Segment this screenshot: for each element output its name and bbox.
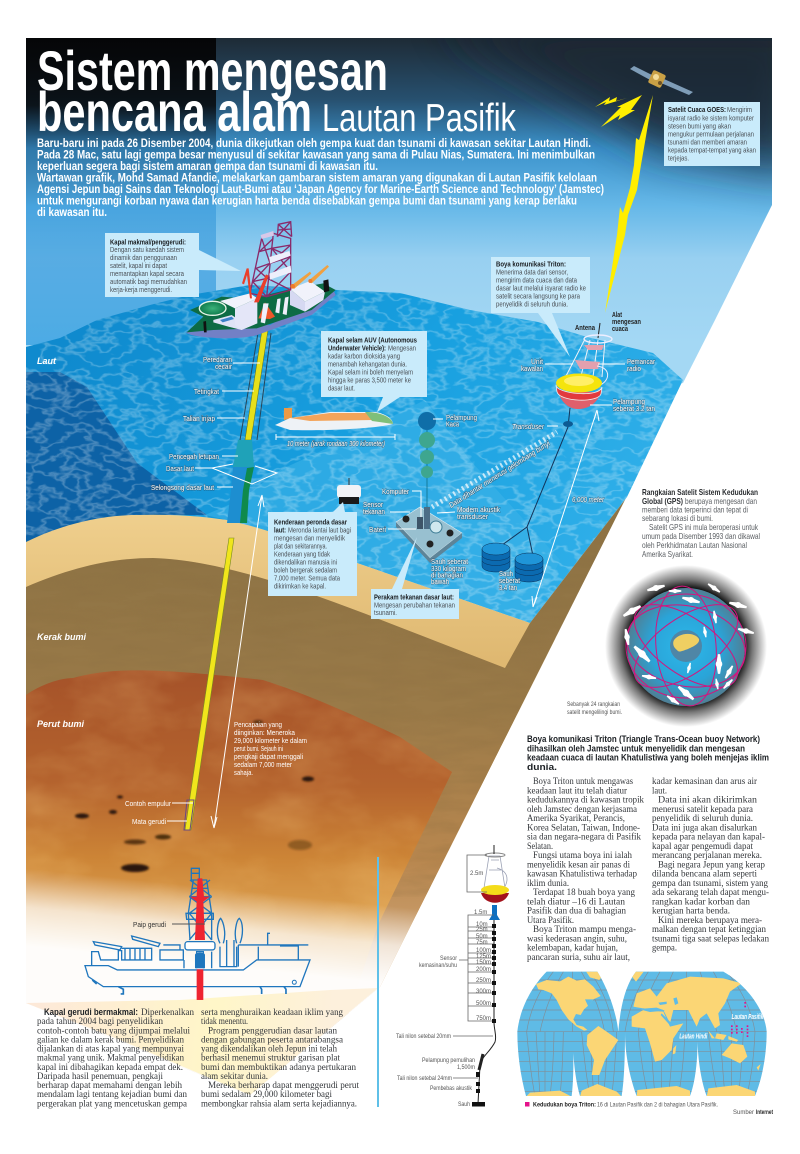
text: Triton article column 2: Data ini juga akan disalurkan [652,822,757,833]
labels: water column: cuaca [612,326,628,333]
derrick white decks [269,251,291,280]
layer: seabed sand [26,515,558,987]
fade to white [26,870,418,1094]
text: Triton article column 1: iklim dunia. [527,878,569,889]
labels: water column: Bateri [369,525,386,534]
Triton buoy illustration [498,323,612,556]
callout: Triton buoy [491,257,590,357]
labels: water column: radio [627,364,641,373]
mooring line [478,920,496,1104]
text: drilling target: pengkaji dapat menggali [234,752,303,761]
labels: earth layers: Kerak bumi [37,632,87,642]
text: Triton article column 1: Korea Selatan, Taiwan, Indone- [527,822,640,833]
depth labels: 125m [476,954,491,960]
text: drilling ship article: kapal ini dibahagikan kepada empat dek. [37,1062,183,1073]
text: GPS description: umum pada Disember 1993 dan dikawal [642,531,760,541]
map: world with Triton buoy positions: Lautan Pasifik [732,1012,764,1021]
labels: water column: Unit [531,357,544,366]
text: GPS description: memberi data terperinci dan tepat di [642,504,748,514]
callout: GOES satellite: kepada tempat-tempat yang akan [668,146,756,154]
labels: water column: kawalan [521,364,543,373]
diagram: drilling ship blueprint [85,868,310,1000]
arrow: 29,000 km drill target [211,495,264,828]
text: drilling ship article: galian ke dalam kerak bumi. Penyelidikan [37,1034,184,1045]
labels: water column: Selongsong dasar laut [151,483,215,492]
callout: AUV: menambah kehangatan dunia. [328,360,407,368]
callout: pressure recorder: tsunami. [374,608,397,617]
callout: pressure recorder: Perakam tekanan dasar laut: [374,592,454,602]
labels: water column: Transduser [512,422,544,431]
depth labels: 50m [476,934,488,940]
callout: AUV: hingga ke paras 3,500 meter ke [328,376,411,384]
depth labels: 10m [476,922,488,928]
earth [670,630,702,662]
callout: AUV: kadar karbon dioksida yang [328,352,400,360]
text: GPS description: oleh Perkhidmatan Lautan Nasional [642,540,747,550]
depth labels: 300m [476,989,491,995]
text: Triton article column 2: Data ini akan dikirimkan [658,794,757,806]
callout: AUV: dasar laut. [328,384,355,392]
heading: Triton network [527,734,769,773]
text: Triton article column 2: kapal agar pengemudi dapat [652,841,753,852]
labels: water column: Sensor [363,500,383,509]
text: drilling ship article: dengan gabungan peserta antarabangsa [201,1034,344,1045]
map: world with Triton buoy positions [510,970,777,1097]
label: drill pipe: Paip gerudi [133,920,166,929]
text: Triton article column 1: Amerika Syarikat, Perancis, [527,813,625,824]
layer: mantle [26,670,452,1040]
panel: ocean [26,285,686,630]
text: GPS description: sebarang lokasi di bumi. [642,513,713,523]
callout: GOES satellite: isyarat radio ke sistem komputer [668,114,754,122]
text: drilling ship article: pergerakan plat yang mencetuskan gempa [37,1098,188,1109]
text: drilling target: Pencapaian yang [234,720,282,729]
helipad [199,301,226,315]
satellites [647,583,665,593]
labels: water column: Pelampung [613,397,645,406]
part labels: Pelampung pemulihan [422,1057,475,1064]
text: Triton article column 1: Boya Triton mampu menga- [533,924,636,935]
labels: water column: Sauh [499,569,513,578]
labels: water column: Peredaran [203,355,232,364]
callout: seabed vehicle: dikendalikan manusia ini [274,558,337,566]
text: drilling target: diinginkan: Meneroka [234,728,296,737]
text: Triton article column 1: keadaan laut itu telah diatur [527,785,628,796]
text: drilling ship article: alam sekitar dunia. [201,1071,268,1082]
callout: Triton buoy: dasar laut melalui isyarat radio ke [496,284,586,292]
text: Triton article column 1: pancaran suria, suhu air laut, [527,952,630,963]
text: drilling ship article: berhasil menemui struktur garisan plat [201,1053,340,1064]
labels: earth layers: Contoh empulur [125,799,171,808]
text: Triton article column 2: laut. [652,785,667,796]
title [37,39,516,143]
callout: GOES satellite [664,102,760,166]
labels: water column: mengesan [612,319,641,326]
wedge: pale base of earth section [26,988,378,1095]
scale bar [276,434,395,440]
callout: seabed vehicle: plat dan sekitarannya. [274,542,327,550]
source credit [733,1109,773,1116]
part labels: Pembebas akustik [430,1085,472,1092]
legend: buoy positions [525,1102,718,1108]
intro text: Baru-baru ini pada 26 Disember 2004, dunia dikejutkan oleh gempa kuat dan tsunami di kawasan sekitar Lautan Hindi. [37,136,591,150]
text: Triton article column 1: Selatan. [527,841,553,852]
text: Triton article column 1: oleh Jamstec dengan kerjasama [527,804,638,815]
text: drilling ship article: makmal yang unik. Makmal penyelidikan [37,1053,184,1064]
legend: buoy positions: 16 di Lautan Pasifik dan 2 di bahagian Utara Pasifik. [597,1102,718,1108]
labels: water column: cecair [215,362,232,371]
text: Triton article column 1 [527,776,644,963]
labels: earth layers: Perut bumi [37,719,85,729]
text: Triton article column 1: Fungsi utama boya ini ialah [533,850,632,861]
text: drilling ship article: mendalam lagi tentang kejadian bumi dan [37,1089,187,1100]
caption: 24 satellites: Sebanyak 24 rangkaian [567,701,620,708]
text: Triton article column 2 [652,776,769,954]
icon: lightning signal bolts [595,89,653,313]
text: Triton article column 1: kedudukannya di kawasan tropik [527,794,644,806]
text: drilling target: sahaja. [234,768,253,777]
seabed pressure recorder [396,507,462,563]
callout: seabed vehicle: Kenderaan yang tidak [274,550,330,558]
callout: drilling laboratory ship: dinamik dan penggunaan [110,253,177,262]
orbits [619,584,753,708]
labels: water column: seberat 3.2 tan [613,404,655,413]
text: drilling ship article: dijalankan di atas kapal yang mempunyai [37,1044,184,1054]
part labels [396,955,475,1108]
text: Triton article column 1: Boya Triton untuk mengawas [533,776,633,787]
labels: earth layers [37,632,193,826]
text: drilling ship article: pada tahun 2004 bagi penyelidikan [37,1016,163,1027]
callout: drilling laboratory ship: kerja-kerja menggerudi. [110,285,172,294]
depth brackets [453,855,494,1078]
callout: AUV: Mengesan [388,344,416,352]
labels: water column: Kaca [446,420,460,428]
depth labels: 500m [476,1001,491,1007]
derrick lattice [250,222,292,297]
text: GPS description: Satelit GPS ini mula beroperasi untuk [649,522,759,532]
source credit: Internet [756,1109,773,1116]
graticule [510,972,777,1096]
text: drilling target: sedalam 7,000 meter [234,760,292,769]
labels: water column: Talian injap [183,414,215,423]
anchors of 3.4 tan [482,543,543,582]
drilling ship [186,222,336,338]
text: drilling ship article: contoh-contoh batu yang dijumpai melalui [37,1025,190,1036]
labels: water column: Pemancar [627,357,655,366]
labels: water column: 330 kilogram [431,564,466,573]
labels: water column: Laut [37,356,57,366]
callout: seabed vehicle [268,502,357,596]
labels: water column: bawah [431,577,449,586]
heading: Triton network: Boya komunikasi Triton (Triangle Trans-Ocean buoy Network) [527,734,760,745]
labels: water column: 10 meter (jarak rondaan 300 kilometer) [287,439,385,448]
callout: Triton buoy: Menerima data dari sensor, [496,268,568,276]
panel: earth cross-section [26,497,636,1100]
callout: seabed vehicle: boleh bergerak sedalam [274,566,337,574]
text: Triton article column 2: penyelidik di seluruh dunia. [652,813,753,824]
heading: Triton network: dunia. [527,762,557,773]
text: Triton article column 2: kepada para nelayan dan kapal- [652,832,765,843]
texture: crust strata [393,586,572,896]
part labels: Sensor [440,955,458,962]
labels: water column: Dasar laut [166,464,195,473]
callout: seabed vehicle: mengesan dan menyelidik [274,534,345,542]
text: GPS description: Global (GPS) [642,496,683,506]
intro text [37,136,604,219]
callout: GOES satellite: mengukur permulaan perjalanan [668,130,754,138]
continents [526,970,761,1097]
labels: water column: Antena [575,325,595,332]
hull [186,290,336,338]
text: drilling target: perut bumi. Sejauh ini [234,744,283,753]
labels: water column: Komputer [382,487,409,496]
depth labels: 100m [476,948,491,954]
labels: water column [37,312,655,592]
intro text: Wartawan grafik, Mohd Samad Afandie, melakarkan gambaran sistem amaran yang digunakan di Lautan Pasifik kelolaan [37,170,597,184]
text: Triton article column 2: kadar kemasinan dan arus air [652,776,758,787]
text: Triton article column 1: kawasan Khatulistiwa terhadap [527,869,637,880]
text: drilling ship article: serta menghuraikan keadaan iklim yang [201,1007,343,1018]
labels: water column: seberat [499,576,521,585]
diagram: Triton mooring depth profile [396,845,509,1108]
text: Triton article column 2: Bagi negara Jepun yang kerap [658,859,765,870]
text: Triton article column 2: malkan dengan tepat ketinggian [652,924,766,935]
depth labels: 150m [476,960,491,966]
buoy [481,845,509,920]
depth labels: 25m [476,927,488,933]
labels: water column: Data dihantar menerusi gelombang bunyi [447,439,552,510]
text: drilling ship article [37,1007,359,1109]
acoustic wave chevrons [432,432,557,507]
depth labels [470,871,491,1022]
part labels: 1,500m [457,1064,475,1071]
labels: water column: Modem akustik [457,505,500,514]
text: Triton article column 2: ada sekarang telah dapat mengu- [652,887,769,898]
inland seas [585,997,678,1026]
cranes [242,268,269,302]
deck [187,283,336,332]
part labels: kemasinan/suhu [419,962,457,969]
labels: water column: di bahagian [431,570,463,580]
depth labels: 75m [476,940,488,946]
labels: water column: Sauh seberat [431,557,469,566]
layer: crust [26,497,627,1095]
text: Triton article column 2: gempa. [652,943,677,954]
text: Triton article column 2: rangkan kadar korban dan [652,896,750,907]
text: Triton article column 2: gempa dan tsunami, sistem yang [652,878,768,889]
callout: GOES satellite: Satelit Cuaca GOES: [668,105,726,114]
legend: buoy positions: Kedudukan boya Triton: [533,1102,596,1108]
title: bencana alam [37,80,312,143]
text: Triton article column 1: sia dan negara-negara di Pasifik [527,832,641,843]
callout: GOES satellite: Mengirim [727,105,752,114]
depth labels: 200m [476,967,491,973]
part labels: Sauh [458,1101,470,1108]
depth labels: 250m [476,978,491,984]
glass floats [418,412,436,507]
labels: water column: Pencegah letupan [169,452,219,461]
intro text: untuk mengurangi korban nyawa dan kerugian harta benda disebabkan gempa bumi dan tsunami yang kerap berlaku [37,194,577,208]
text: GPS description: berupaya mengesan dan [685,496,757,506]
depth labels: 2.5m [470,871,483,877]
text: Triton article column 1: telah diatur –16 di Lautan [527,896,625,907]
intro text: Pada 28 Mac, satu lagi gempa besar menyusul di sekitar kawasan yang sama di Pulau Nias, Sumatera. Ini menimbulkan [37,148,595,162]
title: Lautan Pasifik [322,97,516,140]
intro text: Agensi Jepun bagi Sains dan Teknologi Laut-Bumi atau ‘Japan Agency for Marine-Earth Science and Technology’ (Jamstec) [37,182,604,196]
drill pipe through crust and mantle [184,538,234,830]
text: drilling ship article: Diperkenalkan [141,1007,194,1018]
text: Triton article column 2: kerugian harta benda. [652,906,730,917]
text: GPS description [642,487,760,559]
drill floor legs and flare [258,302,275,319]
text: Triton article column 1: menyelidik kesan air panas di [527,859,630,870]
text: Triton article column 2: Kini mereka berupaya mera- [658,915,762,926]
autonomous underwater vehicle [275,408,395,440]
labels: water column: Tetingkat [194,387,220,396]
arrow: 6,000 meter depth [532,410,599,607]
callout: AUV: Kapal selam ini boleh menyelam [328,368,413,376]
ocean labels: Lautan Hindi [679,1032,708,1041]
labels: earth layers: Mata gerudi [132,817,166,826]
text: Triton article column 2: merancang perjalanan mereka. [652,850,762,861]
mantle dark pockets [75,720,314,872]
panel: sky background [26,38,772,384]
callout: GOES satellite: tsunami dan memberi amaran [668,138,747,146]
text: drilling ship article: Kapal gerudi bermakmal: [44,1007,138,1018]
text: Triton article column 2: dilanda bencana alam seperti [652,869,757,880]
text: drilling ship article: bumi sedalam 29,000 kilometer bagi [201,1089,332,1100]
text: drilling ship article: Mereka berharap dapat menggerudi perut [208,1080,359,1091]
callout: seabed vehicle: Meronda lantai laut bagi [288,526,351,534]
callout: drilling laboratory ship: Kapal makmal/penggerudi: [110,238,186,246]
intro text: keperluan segera bagi sistem amaran gempa dan tsunami di kawasan itu. [37,159,378,173]
caption: 24 satellites [567,701,622,716]
part labels: Tali nilon setebal 20mm [396,1033,451,1040]
text: drilling target [234,720,307,777]
text: Triton article column 2: menerusi satelit kepada para [652,804,754,815]
chart: GPS satellite constellation globe [605,565,767,727]
callout: drilling laboratory ship: satelit, kapal ini dapat [110,261,168,270]
callout: drilling laboratory ship: Dengan satu kaedah sistem [110,245,184,254]
callout: AUV [321,331,427,412]
labels: water column: tekanan [363,507,385,516]
labels: water column: 6,000 meter [572,495,604,504]
text: drilling ship article: berharap dapat memahami dengan lebih [37,1080,182,1091]
intro text: di kawasan itu. [37,205,107,219]
text: drilling ship article: tidak menentu. [201,1016,248,1027]
text: drilling ship article: bumi dan membuktikan adanya pertukaran [201,1062,356,1073]
callout: seabed vehicle: Kenderaan peronda dasar [274,518,347,526]
divider line [377,857,379,1107]
buoy positions [731,1002,748,1037]
labels: water column: 3.4 tan [499,583,517,592]
text: Triton article column 2: tsunami tiga saat selepas ledakan [652,933,769,944]
callout: AUV: Kapal selam AUV (Autonomous [328,336,417,344]
label: drill pipe [133,920,205,929]
text: Triton article column 1: wasi kederasan angin, suhu, [527,933,627,944]
labels: water column: Pelampung [446,413,477,422]
title: Sistem mengesan [37,39,388,102]
callout: drilling laboratory ship: memantapkan kapal secara [110,269,185,278]
labels: water column: Alat [612,312,622,319]
callout: AUV: Underwater Vehicle): [328,344,386,352]
callout: seabed vehicle: laut: [274,526,286,534]
text: GPS description: Amerika Syarikat. [642,549,693,559]
callout: seabed vehicle: dikirimkan ke kapal. [274,582,326,590]
callout: pressure recorder: Mengesan perubahan tekanan [374,600,455,610]
text: Triton article column 1: Utara Pasifik. [527,915,574,926]
source credit: Sumber [733,1109,755,1116]
heading: Triton network: dihasilkan oleh Jamstec untuk menyelidik dan mengesan [527,744,745,754]
depth labels: 1.5m [474,910,487,916]
callout: Triton buoy: mengirim data cuaca dan data [496,276,578,284]
part labels: Tali nilon setebal 24mm [397,1075,452,1082]
text: GPS description: Rangkaian Satelit Sistem Kedudukan [642,487,758,497]
icon: GOES satellite [630,66,693,95]
text: Triton article column 1: Terdapat 18 buah boya yang [533,887,635,898]
text: Triton article column 1: Pasifik dan dua di bahagian [527,906,626,917]
callout: Triton buoy: satelit secara langsung ke para [496,292,581,300]
text: drilling ship article: Daripada hasil penemuan, pengkaji [37,1071,163,1082]
callout: drilling laboratory ship [105,233,241,297]
callout: drilling laboratory ship: automatik bagi memudahkan [110,277,187,286]
text: drilling ship article: Program penggerudian dasar lautan [208,1025,337,1036]
depth labels: 750m [476,1016,491,1022]
deck blocks [213,315,242,330]
texture: mantle blotches [26,670,446,910]
text: drilling target: 29,000 kilometer ke dalam [234,736,307,745]
callout: Triton buoy: penyelidik di seluruh dunia. [496,300,568,308]
callout: pressure recorder [371,537,459,619]
callout: GOES satellite: stesen bumi yang akan [668,122,731,130]
remotely operated seabed vehicle [337,478,361,504]
drill string: riser, blowout preventer and casing [227,330,271,523]
text: drilling ship article: yang dikendalikan oleh Jepun ini telah [201,1044,337,1054]
labels: water column: transduser [457,512,488,521]
callout: Triton buoy: Boya komunikasi Triton: [496,260,566,268]
text: drilling ship article: membongkar rahsia alam serta kejadiannya. [201,1098,357,1109]
text: Triton article column 1: kelembapan, kadar hujan, [527,943,618,954]
callout: GOES satellite: terjejas. [668,154,689,162]
caption: 24 satellites: satelit mengelilingi bumi. [567,709,622,716]
callout: seabed vehicle: 7,000 meter. Semua data [274,574,341,582]
